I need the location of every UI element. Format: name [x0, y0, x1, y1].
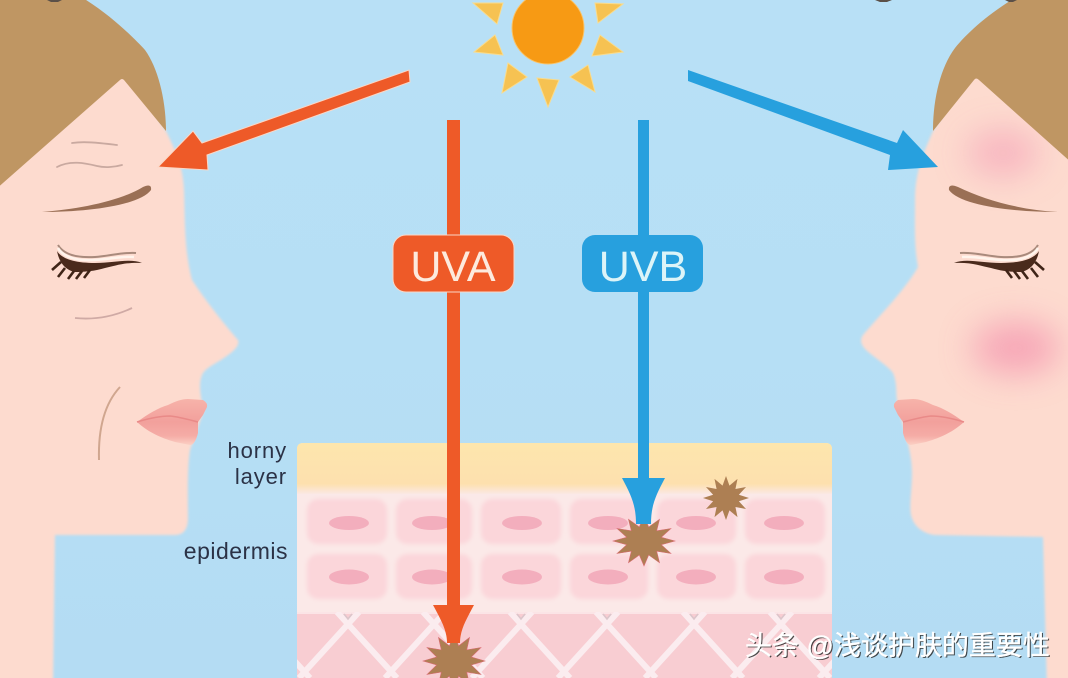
label: epidermis: epidermis [184, 538, 288, 564]
label: horny layer: horny [227, 438, 287, 463]
dermis lattice [297, 614, 832, 678]
watermark: 头条 @浅谈护肤的重要性 [746, 632, 1051, 662]
left hair [0, 0, 166, 190]
epidermis cells [307, 499, 825, 599]
UVB downward arrow with damage star [613, 120, 675, 566]
epidermis base [297, 443, 832, 678]
watermark: 头条 @浅谈护肤的重要性 [745, 631, 1050, 661]
UVB star [613, 516, 675, 566]
sun disc [512, 0, 584, 64]
panel: left aged face [0, 0, 238, 678]
arrow: UVA to face [158, 70, 410, 170]
panel: right sun-burned face [861, 0, 1068, 678]
UVA shaft and head [433, 120, 474, 643]
left under-eye wrinkle [75, 308, 132, 319]
UVB shaft and head [622, 120, 665, 524]
left eyebrow [42, 186, 151, 212]
left closed eye [52, 245, 142, 279]
arrow: UVB to face [688, 70, 938, 170]
badge: UVA: UVA [410, 243, 496, 291]
badge: UVB: UVB [599, 243, 687, 291]
icon: sun [473, 0, 623, 107]
horny layer band [297, 443, 832, 494]
left face skin [0, 0, 238, 678]
label: layer: layer [235, 464, 287, 489]
badge: UVA [393, 235, 514, 292]
right eyebrow [949, 186, 1058, 212]
left forehead wrinkles [57, 142, 122, 167]
right closed eye [954, 245, 1044, 279]
icon: small damage star [703, 476, 749, 520]
right face skin [861, 0, 1068, 678]
sun rays [473, 3, 623, 107]
left cheek line [99, 387, 120, 460]
cell nuclei [329, 516, 804, 584]
right blush spots [967, 131, 1060, 374]
UVA downward arrow with damage star [423, 120, 485, 678]
UVA star [423, 634, 485, 678]
left lips [137, 399, 207, 445]
badge: UVB [582, 235, 703, 292]
right lips [894, 399, 964, 445]
panel: skin cross-section [297, 443, 832, 678]
top edge dark marks [47, 0, 1017, 2]
right hair [933, 0, 1068, 164]
